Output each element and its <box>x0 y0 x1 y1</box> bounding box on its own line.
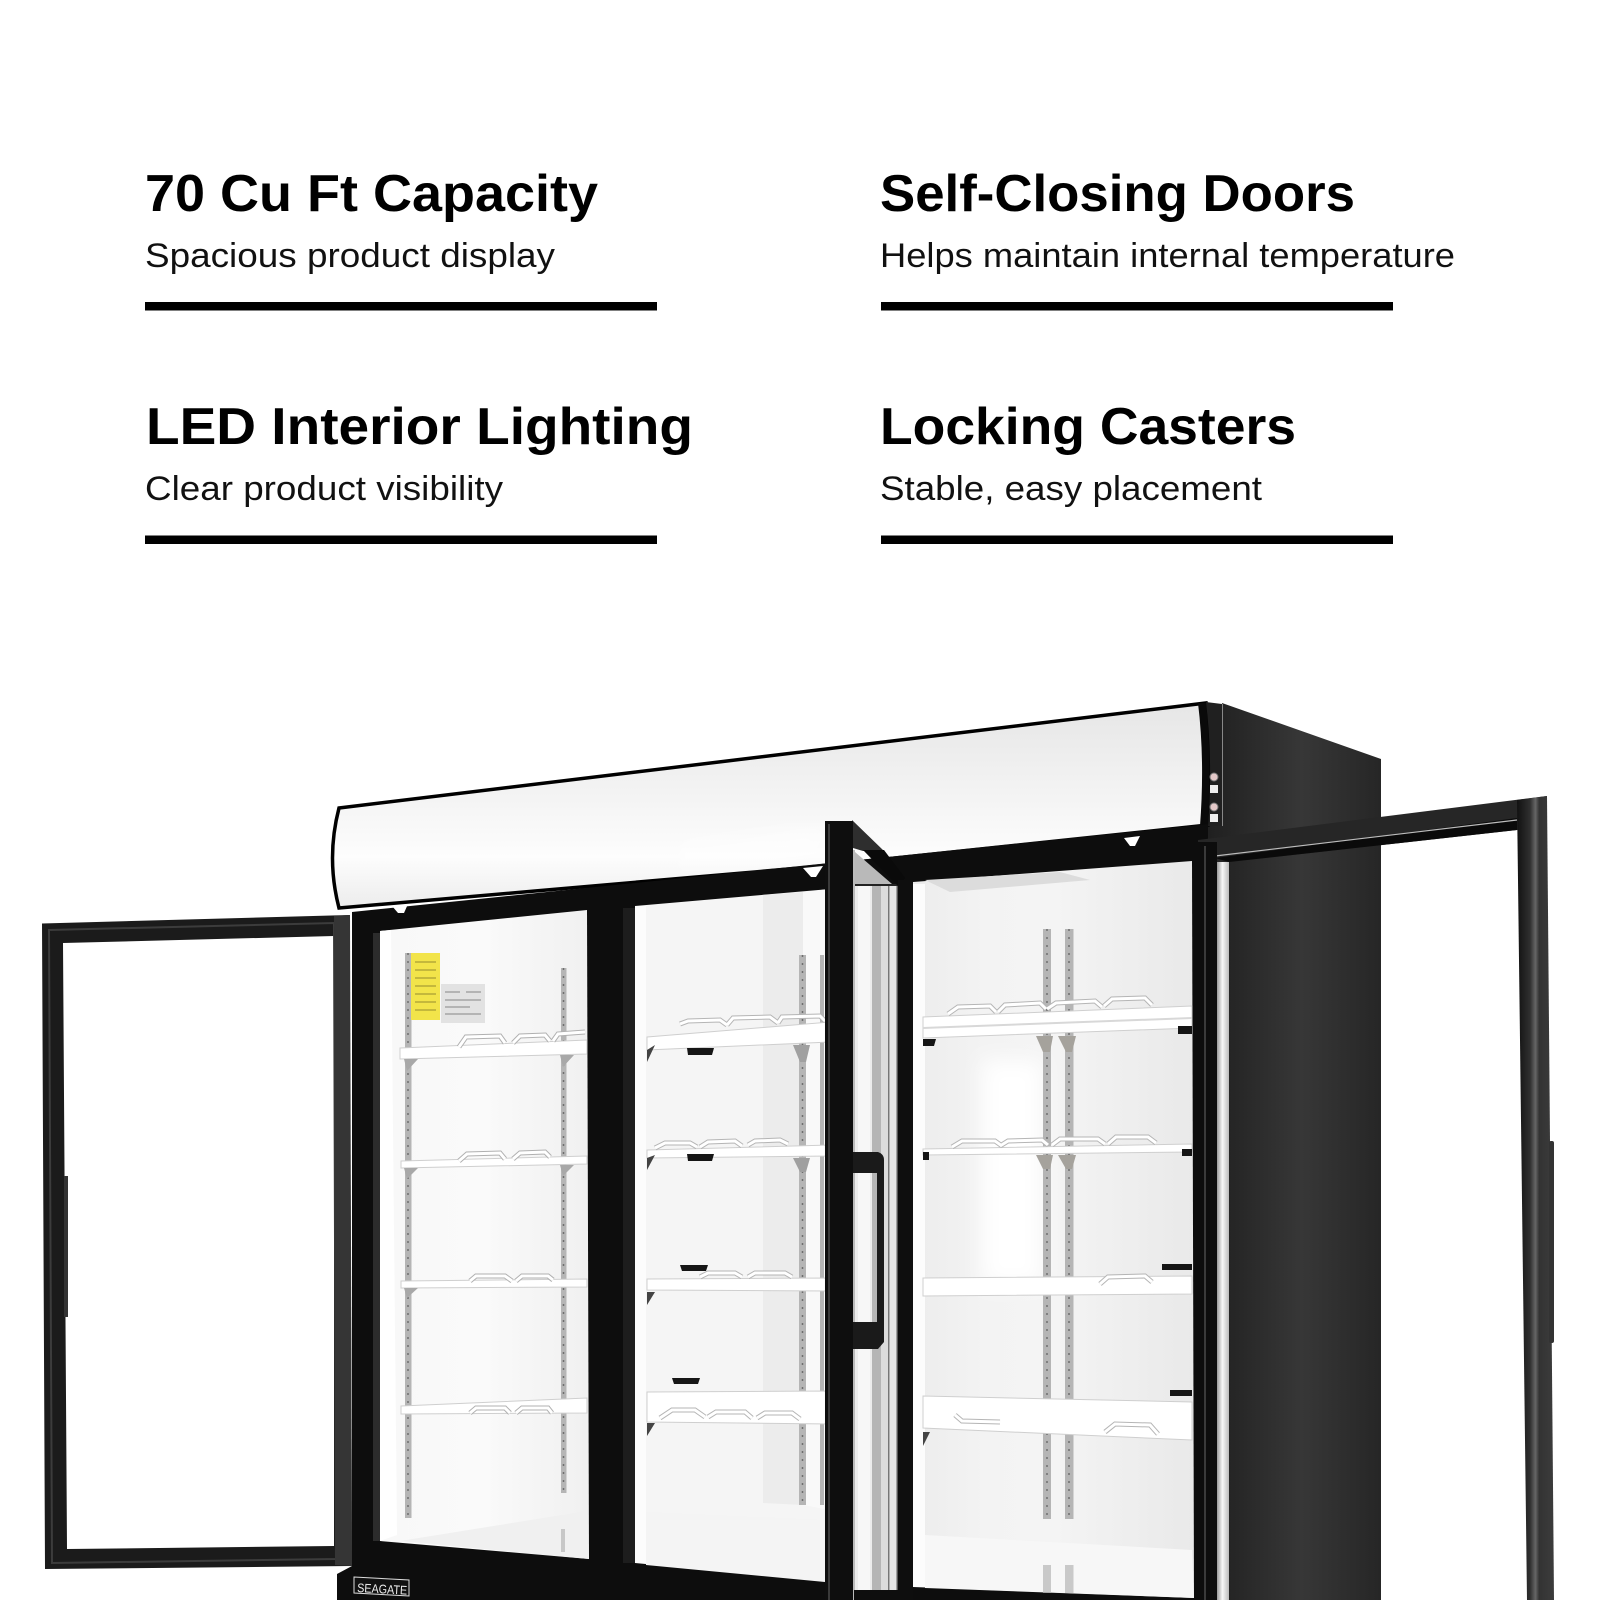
interior bay 3 <box>913 861 1194 1598</box>
heading: 70 Cu Ft Capacity: 70 Cu Ft Capacity <box>145 165 598 223</box>
shelves: bay 1 <box>400 1032 587 1414</box>
illuminated canopy <box>332 703 1210 908</box>
shelf rails <box>405 929 1074 1593</box>
description: Clear product visibility: Clear product visibility <box>145 470 503 508</box>
rule <box>145 536 657 544</box>
warning labels <box>411 953 485 1023</box>
heading: Locking Casters: Locking Casters <box>880 398 1296 456</box>
feature: 70 Cu Ft Capacity <box>145 165 657 310</box>
shelves: bay 2 <box>647 1016 830 1436</box>
rule <box>881 302 1393 310</box>
heading: Self-Closing Doors: Self-Closing Doors <box>880 165 1355 223</box>
feature: Locking Casters <box>880 398 1393 544</box>
left door open <box>42 915 352 1569</box>
canopy end cap with gauges <box>1206 702 1223 826</box>
front frame <box>337 824 1208 1600</box>
product: three-door display refrigerator <box>42 702 1554 1600</box>
rule <box>881 536 1393 544</box>
SEAGATE nameplate <box>354 1577 409 1598</box>
feature: LED Interior Lighting <box>145 398 693 544</box>
door handle <box>853 1152 884 1349</box>
right door open <box>1195 796 1554 1600</box>
feature: Self-Closing Doors <box>880 165 1455 310</box>
interior bay 2 <box>623 889 830 1582</box>
SEAGATE nameplate: SEAGATE <box>357 1581 408 1598</box>
heading: LED Interior Lighting: LED Interior Lighting <box>146 398 693 456</box>
description: Spacious product display: Spacious product display <box>145 237 555 275</box>
description: Helps maintain internal temperature: Helps maintain internal temperature <box>880 237 1455 275</box>
description: Stable, easy placement: Stable, easy placement <box>880 470 1263 508</box>
cabinet side panel <box>1205 703 1381 1600</box>
interior bay 1 <box>373 910 589 1559</box>
door hinges <box>392 836 1140 913</box>
rule <box>145 302 657 310</box>
shelves: bay 3 <box>923 998 1192 1446</box>
center door open <box>825 820 913 1600</box>
